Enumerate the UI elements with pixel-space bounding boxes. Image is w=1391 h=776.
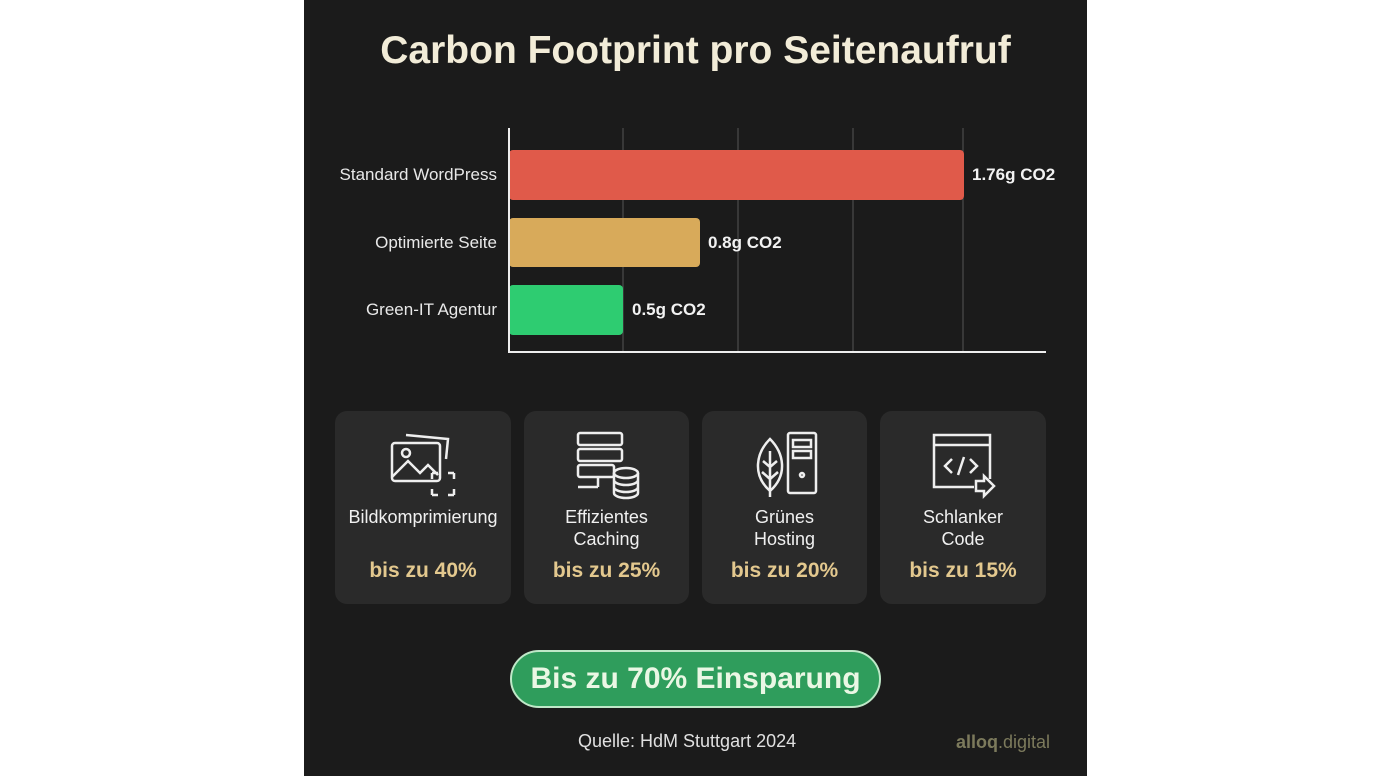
card: Bildkomprimierung xyxy=(335,411,511,604)
card: Hosting: Hosting xyxy=(754,529,815,549)
source text: Quelle: HdM Stuttgart 2024 xyxy=(578,731,796,751)
card: Hosting xyxy=(702,411,867,604)
icon: code window xyxy=(932,434,996,499)
card: Schlanker Code: Code xyxy=(941,529,985,549)
card: Hosting: Grünes xyxy=(755,507,814,527)
card: Schlanker Code xyxy=(880,411,1046,604)
bar chart: 0.5g CO2 xyxy=(632,300,706,319)
bar chart: Green-IT Agentur xyxy=(366,300,497,319)
callout: savings pill: Bis zu 70% Einsparung xyxy=(530,662,861,695)
card: Schlanker Code: bis zu 15% xyxy=(909,559,1017,582)
card: Caching: Caching xyxy=(573,529,640,549)
icon: image compress xyxy=(390,434,456,496)
panel: dark background xyxy=(304,0,1087,776)
bar chart: 1.76g CO2 xyxy=(972,165,1055,184)
card: Bildkomprimierung: Bildkomprimierung xyxy=(348,507,498,527)
icon: leaf server xyxy=(756,432,818,497)
card: Caching: bis zu 25% xyxy=(553,559,660,582)
bar chart: Standard WordPress xyxy=(340,165,497,184)
card: Schlanker Code: Schlanker xyxy=(923,507,1003,527)
callout: savings pill xyxy=(510,650,881,708)
card: Caching: Effizientes xyxy=(565,507,648,527)
card: Caching xyxy=(524,411,689,604)
title: Carbon Footprint pro Seitenaufruf xyxy=(380,29,1011,72)
bar chart: 0.8g CO2 xyxy=(708,233,782,252)
bar chart: Optimierte Seite xyxy=(375,233,497,252)
icon: server database xyxy=(576,432,640,500)
card: Hosting: bis zu 20% xyxy=(731,559,838,582)
bar chart xyxy=(340,128,1055,353)
logo: alloq.digital xyxy=(956,732,1050,752)
card: Bildkomprimierung: bis zu 40% xyxy=(369,559,477,582)
